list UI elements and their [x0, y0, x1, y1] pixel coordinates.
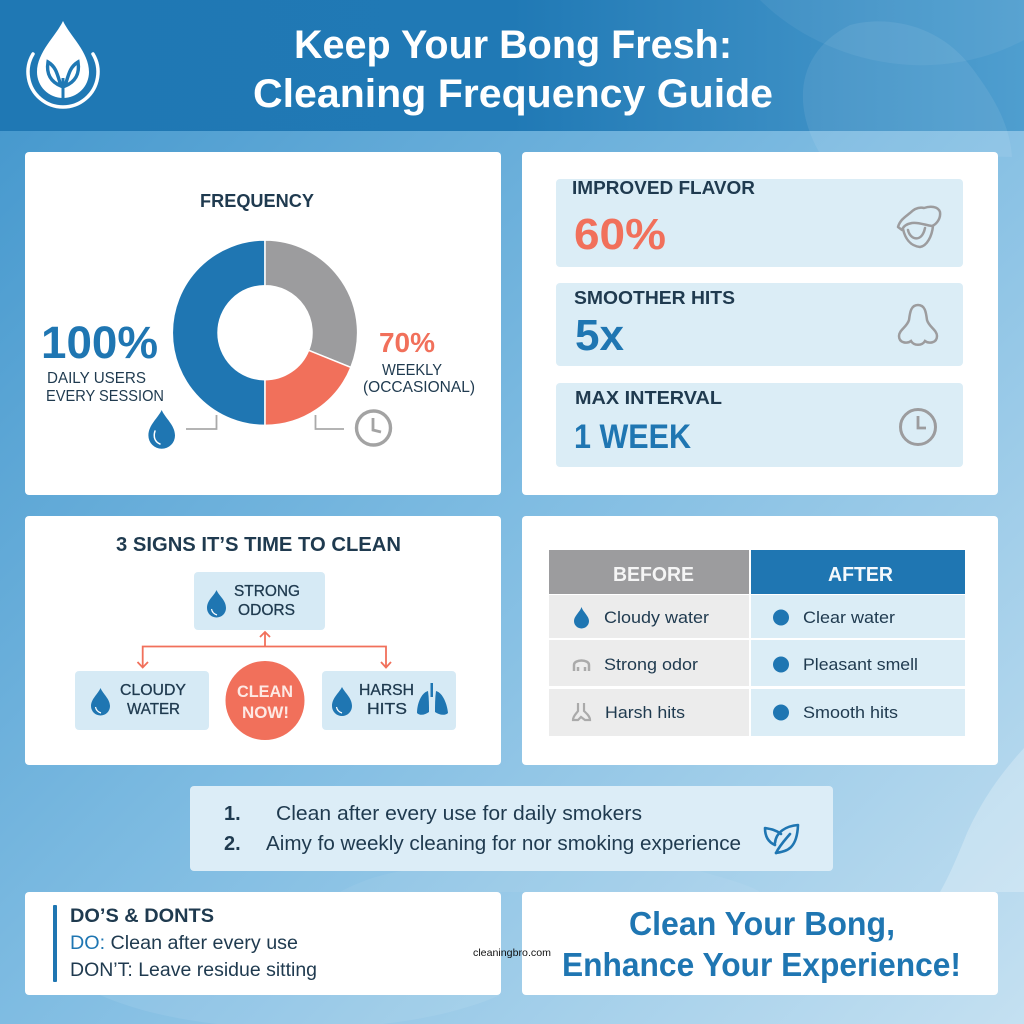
metric: max interval: 1 WEEK	[574, 418, 691, 456]
column: before: BEFORE	[613, 564, 694, 586]
icon: lungs	[417, 683, 448, 715]
icon: water drop	[148, 410, 175, 449]
stat: 70% weekly: 70%	[379, 327, 435, 358]
sign: cloudy water	[75, 671, 209, 730]
sign: strong odors: STRONG	[234, 583, 300, 600]
column: before	[549, 550, 749, 736]
icon: nose	[899, 305, 937, 345]
watermark: cleaningbro.com	[473, 947, 551, 959]
column: after: AFTER	[828, 564, 894, 586]
stat: 70% weekly: WEEKLY	[382, 362, 442, 379]
panel: before and after table	[522, 516, 998, 765]
stat: 100% daily users: 100%	[41, 317, 158, 368]
column: after	[751, 550, 965, 736]
arrows: connectors	[138, 632, 391, 668]
title: Cleaning Frequency Guide	[253, 72, 773, 116]
metric: max interval: MAX INTERVAL	[575, 388, 722, 408]
metric: max interval	[556, 383, 963, 467]
sign: strong odors	[194, 572, 325, 630]
panel: do's and don'ts: DO’S & DONTS	[70, 906, 214, 927]
panel: closing message: Enhance Your Experience!	[562, 946, 961, 983]
title	[253, 23, 773, 116]
column: after: Pleasant smell	[803, 655, 918, 674]
heading: 3 signs: 3 SIGNS IT’S TIME TO CLEAN	[116, 534, 401, 556]
stat: 70% weekly	[363, 327, 475, 396]
panel: closing message: Clean Your Bong,	[629, 905, 895, 942]
callout: clean now: NOW!	[242, 703, 289, 722]
sign: harsh hits: HITS	[367, 701, 407, 718]
sign: cloudy water: WATER	[127, 701, 180, 718]
panel: metrics	[522, 152, 998, 495]
metric: improved flavor	[556, 178, 963, 267]
metric: improved flavor: IMPROVED FLAVOR	[572, 178, 755, 198]
sign: cloudy water: CLOUDY	[120, 682, 186, 699]
icon: lungs outline	[573, 703, 590, 720]
heading: frequency: FREQUENCY	[200, 191, 314, 211]
icon: water drop	[574, 607, 589, 628]
icon: odor	[574, 660, 589, 671]
column: before: Cloudy water	[604, 608, 709, 627]
column: before: Harsh hits	[605, 703, 685, 722]
column: after: Clear water	[803, 608, 895, 627]
metric: smoother hits	[556, 283, 963, 366]
panel: do's and don'ts: DO: Clean after every use	[70, 933, 298, 954]
sign: strong odors: ODORS	[238, 602, 295, 619]
panel: do's and don'ts: DON’T: Leave residue sitting	[70, 960, 317, 981]
callout: clean now: CLEAN	[237, 682, 293, 701]
icon: clock	[356, 411, 390, 445]
panel: tips	[190, 786, 833, 871]
panel: tips: 1.	[224, 803, 241, 825]
stat: 70% weekly: (OCCASIONAL)	[363, 379, 475, 396]
icon: water drop logo	[28, 21, 98, 107]
icon: leaf	[765, 825, 798, 853]
column: after: Smooth hits	[803, 703, 898, 722]
stat: 100% daily users: EVERY SESSION	[46, 388, 164, 405]
panel: frequency donut	[25, 152, 501, 495]
metric: smoother hits: 5x	[575, 311, 625, 360]
panel: 3 signs	[25, 516, 501, 765]
sign: harsh hits: HARSH	[359, 682, 414, 699]
stat: 100% daily users	[41, 317, 164, 405]
column: before: Strong odor	[604, 655, 698, 674]
icon: clock	[900, 410, 936, 444]
panel: do's and don'ts	[25, 892, 501, 995]
icon: tongue	[898, 207, 940, 247]
stat: 100% daily users: DAILY USERS	[47, 370, 146, 387]
panel: closing message	[522, 892, 998, 995]
metric: improved flavor: 60%	[574, 210, 666, 259]
callout: clean now	[226, 661, 304, 740]
metric: smoother hits: SMOOTHER HITS	[574, 288, 735, 308]
panel: tips: Clean after every use for daily smokers	[276, 803, 642, 825]
panel: tips: Aimy fo weekly cleaning for nor smoking experience	[266, 833, 741, 855]
header banner	[0, 0, 1024, 157]
sign: harsh hits	[322, 671, 456, 730]
title: Keep Your Bong Fresh:	[294, 23, 732, 67]
donut chart	[172, 240, 358, 425]
panel: tips: 2.	[224, 833, 241, 855]
